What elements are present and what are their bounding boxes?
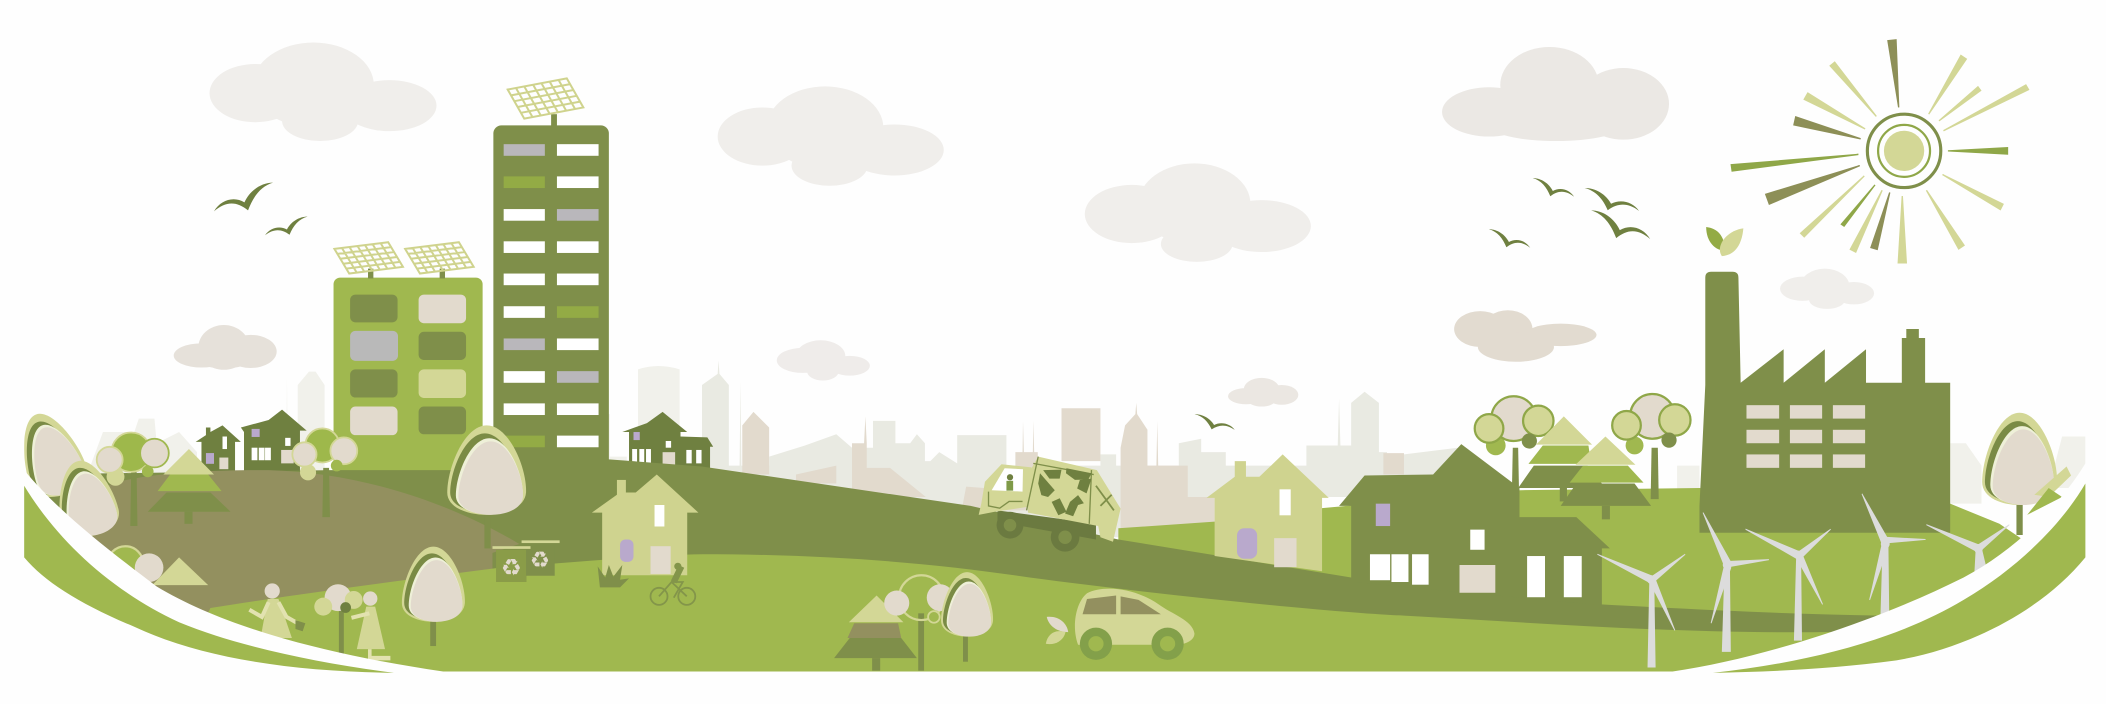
cloud: small by the bird [1228, 378, 1298, 407]
cloud: small over skyline [777, 340, 870, 381]
pine tree: right 1 [1518, 416, 1605, 501]
tall tower [493, 125, 609, 475]
cloud: centre right [1085, 163, 1311, 262]
small house C [622, 412, 713, 475]
ground: dark green hill [24, 459, 1880, 672]
wind turbine 4 [1862, 494, 1926, 620]
round tree: right 2 [1612, 394, 1691, 499]
egg tree: far left top [8, 404, 93, 504]
skyline: faint far towers [81, 366, 2085, 504]
small house B [241, 410, 307, 475]
small trees: bottom left [107, 546, 208, 585]
round tree: sapling between people [314, 584, 363, 654]
bottom margin [0, 672, 2106, 704]
bird: centre [1195, 414, 1235, 430]
pine tree: right 2 [1561, 437, 1651, 519]
person standing [351, 591, 390, 660]
cloud: small left [174, 325, 277, 370]
egg tree: foreground left [402, 547, 465, 646]
big dark house [1339, 444, 1610, 605]
mid-rise building [334, 278, 483, 477]
electric car with leaves [1046, 589, 1194, 660]
skyline: beige foreground layer [742, 403, 1404, 537]
pine tree: left [148, 449, 231, 524]
wind turbine 1 [1597, 554, 1685, 667]
ground: light green foreground [179, 554, 1925, 672]
egg tree: far right [1982, 413, 2071, 535]
recycling bins: ♻ [530, 548, 550, 574]
cloud: top left [210, 43, 437, 141]
egg tree: by tower [447, 425, 526, 548]
solar panel: tower [508, 78, 583, 127]
ground: rear light green [1118, 488, 2085, 672]
gardener with watering can [249, 583, 305, 638]
round tree: left [97, 432, 169, 526]
white swoosh: right [1673, 403, 2106, 704]
green band: left [24, 486, 394, 673]
garbage truck [979, 457, 1121, 552]
solar panels: mid-rise [334, 242, 474, 278]
skyline: pale background layer [702, 360, 1458, 537]
green band: right [1713, 484, 2085, 673]
round tree: right 1 [1475, 396, 1554, 492]
wind turbine 3 [1746, 529, 1831, 640]
wind turbine 5 [1926, 525, 2009, 586]
grass tuft [598, 565, 629, 587]
round tree: centre hill [292, 428, 357, 517]
cloud: top right [1442, 47, 1669, 141]
small house A [196, 425, 241, 475]
egg tree: far left lower [49, 455, 123, 542]
cloud: beige right [1454, 310, 1596, 362]
cloud: centre left [718, 86, 944, 186]
yellow house left [592, 475, 698, 575]
yellow house right [1207, 454, 1329, 571]
icon: leaves above chimney [1706, 227, 1743, 256]
ground: olive-brown hill [45, 470, 519, 636]
birds: right flock [1489, 178, 1650, 248]
white swoosh: left [0, 403, 443, 704]
recycling bins: ♻ [501, 554, 522, 581]
cloud: beside factory [1780, 269, 1874, 309]
recycling bins [492, 540, 560, 582]
factory [1699, 272, 1950, 533]
wind turbine 2 [1703, 513, 1769, 651]
foreground tree cluster [834, 572, 993, 671]
cyclist [651, 564, 695, 605]
sun [1731, 40, 2029, 263]
birds: left pair [214, 183, 308, 235]
